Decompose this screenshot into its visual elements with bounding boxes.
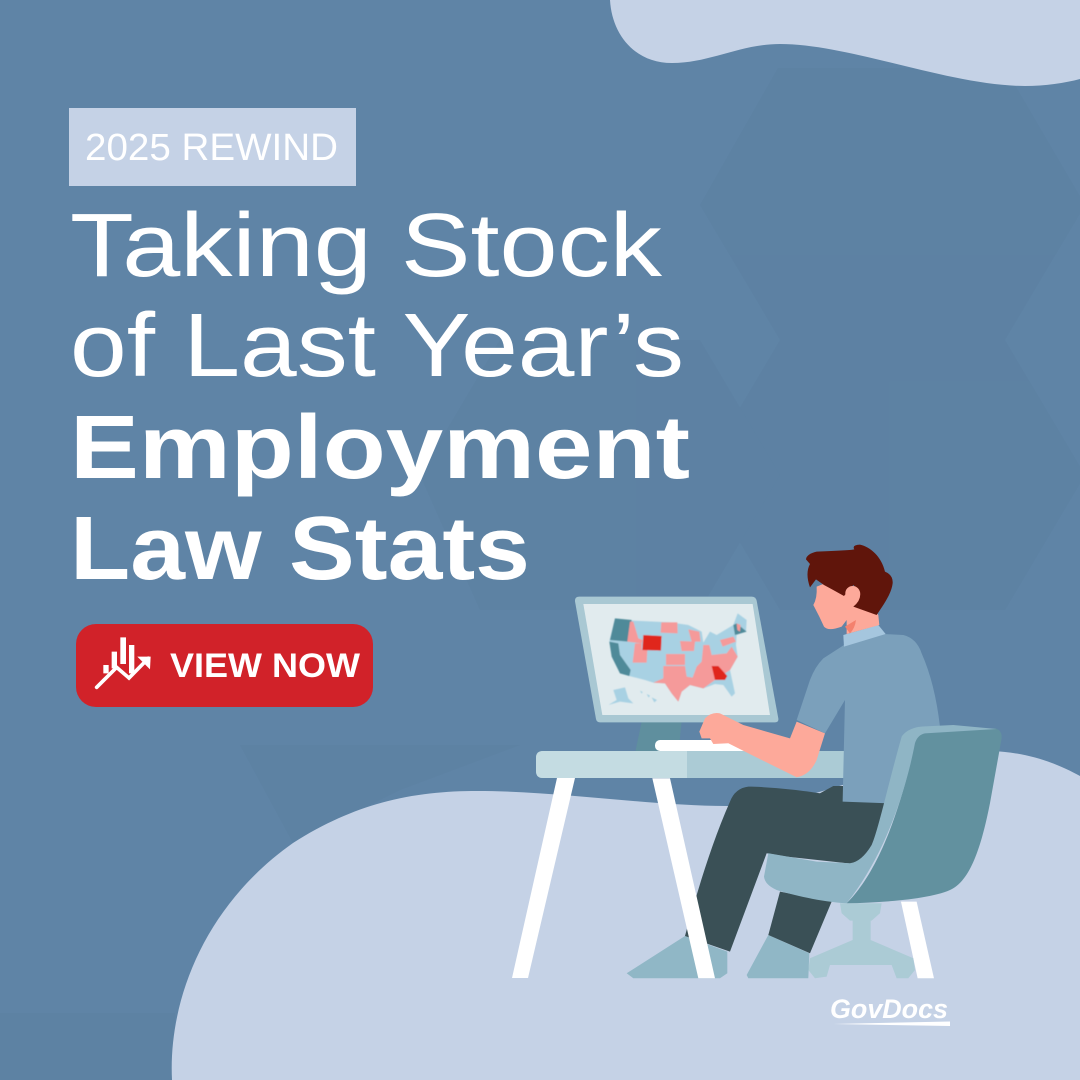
tag: 2025 rewind [69,108,356,186]
shoes [627,935,809,978]
icon: rising chart arrow [97,637,151,687]
chair base [808,903,915,978]
title [70,196,690,599]
neck shadow [845,620,856,633]
hair [806,545,893,615]
ear [845,586,860,601]
illustration: person at chair [627,545,1002,978]
button: view now: VIEW NOW [170,647,361,685]
collar [843,625,886,647]
forearm and hand [699,713,825,777]
chair seat light [764,725,997,903]
head and neck [813,580,879,634]
illustration: desk [512,740,850,978]
title: Taking Stock [70,196,663,296]
logo: GovDocs: GovDocs [830,994,948,1024]
bottom blob [172,751,1080,1080]
map of the United States [608,613,747,705]
top right blob [610,0,1080,86]
trousers [685,786,897,953]
title: Employment [70,398,690,498]
title: of Last Year’s [70,296,684,396]
chair back dark [847,728,1002,903]
illustration: monitor with US map [575,597,778,753]
tag: 2025 rewind: 2025 REWIND [85,127,338,169]
title: Law Stats [70,499,530,599]
button: view now [76,624,373,707]
front desk leg [652,778,715,978]
shirt [797,634,940,803]
